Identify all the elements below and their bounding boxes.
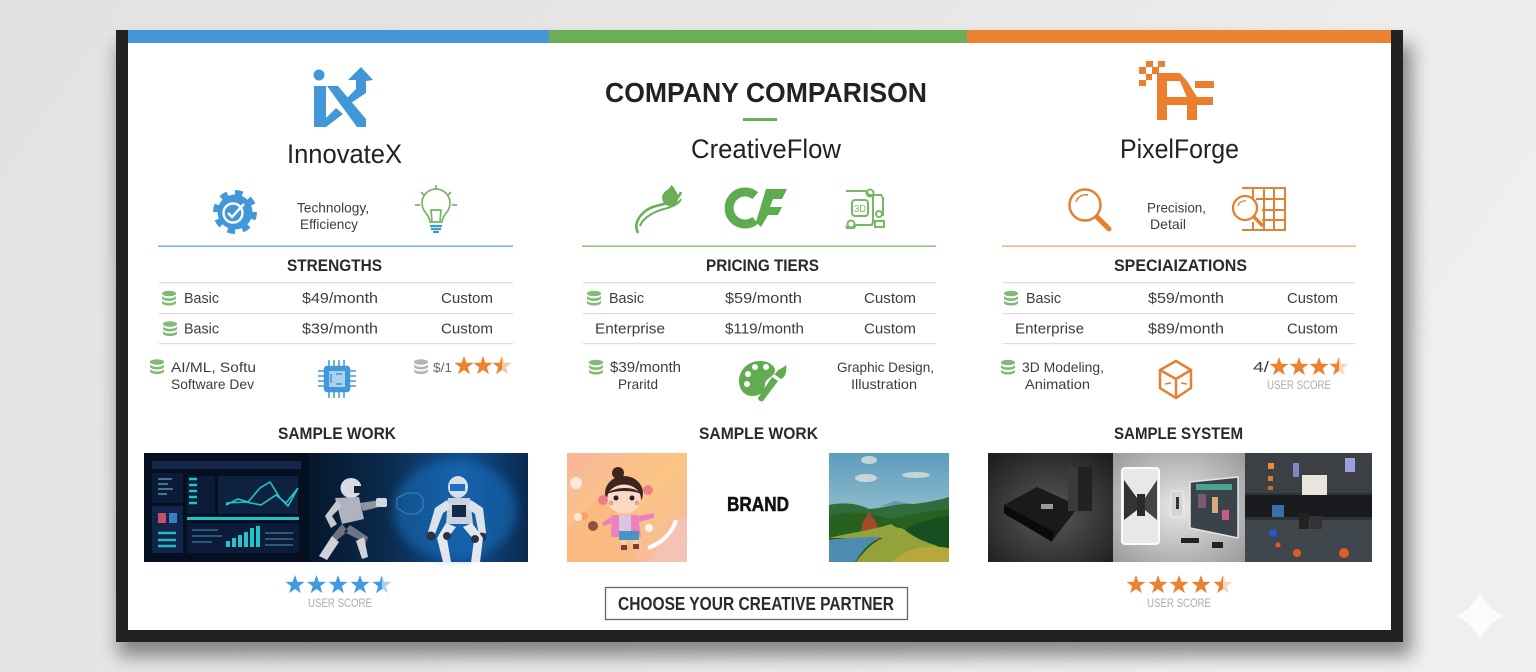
row: basic: Custom bbox=[864, 290, 916, 307]
entry price text bbox=[589, 359, 681, 392]
focus text: Efficiency bbox=[300, 216, 358, 232]
row: enterprise: $89/month bbox=[1148, 320, 1224, 338]
row: enterprise: Enterprise bbox=[1015, 320, 1084, 338]
row: basic: Custom bbox=[1287, 290, 1338, 307]
rating: blue stars bbox=[285, 575, 392, 593]
icon: 3D workflow bbox=[846, 190, 884, 228]
heading: pricing tiers: PRICING TIERS bbox=[706, 257, 819, 275]
white panel bbox=[128, 43, 1391, 630]
focus text: Detail bbox=[1150, 216, 1186, 232]
logo: PixelForge bbox=[1139, 61, 1214, 120]
row: basic 39 bbox=[163, 320, 493, 338]
icon: sparkle watermark bbox=[1456, 592, 1504, 640]
main title: COMPANY COMPARISON bbox=[605, 77, 927, 108]
logo: CF bbox=[729, 189, 787, 227]
row: basic: $59/month bbox=[725, 290, 802, 307]
icon: flame swoosh bbox=[636, 185, 681, 233]
heading: sample system: SAMPLE SYSTEM bbox=[1114, 425, 1243, 443]
rating: partial row bbox=[414, 356, 512, 375]
row: basic 49: Custom bbox=[441, 290, 493, 307]
specialty text: Illustration bbox=[851, 376, 917, 392]
user score label: USER SCORE bbox=[308, 598, 372, 610]
specialty text bbox=[150, 359, 256, 392]
robot right bbox=[426, 476, 486, 562]
specialty text: Graphic Design, bbox=[837, 359, 934, 375]
row: basic bbox=[587, 290, 916, 307]
logo: InnovateX bbox=[314, 67, 373, 127]
focus text: Technology, bbox=[297, 200, 369, 216]
sample image: character illustration bbox=[567, 453, 687, 562]
rating: partial score: USER SCORE bbox=[1267, 380, 1331, 392]
focus text bbox=[297, 200, 369, 232]
row: basic 39: Basic bbox=[184, 320, 219, 338]
title underline bbox=[743, 118, 777, 121]
row: basic 49: $49/month bbox=[302, 290, 378, 307]
specialty text: Software Dev bbox=[171, 376, 254, 392]
row: basic: $59/month bbox=[1148, 290, 1224, 307]
sample image: dashboard and robots bbox=[144, 453, 528, 562]
robot left bbox=[319, 478, 387, 560]
rating: partial row: $/1 bbox=[433, 360, 452, 375]
panel: InnovateX bbox=[144, 67, 528, 610]
heading: sample work: SAMPLE WORK bbox=[699, 425, 818, 443]
rating: partial score: 4/ bbox=[1253, 359, 1270, 376]
board frame bbox=[116, 30, 1403, 642]
specialty text: 3D Modeling, bbox=[1022, 359, 1104, 375]
row: basic bbox=[1004, 290, 1338, 307]
icon: chip bbox=[318, 360, 356, 398]
rating: partial score bbox=[1253, 357, 1349, 392]
panel: CreativeFlow: 3D bbox=[854, 204, 866, 215]
specialty text: AI/ML, Softu bbox=[171, 359, 256, 375]
sample image: landscape painting bbox=[829, 453, 949, 562]
sample image: product renders bbox=[988, 453, 1372, 562]
row: enterprise bbox=[1015, 320, 1338, 338]
entry price text: $39/month bbox=[610, 359, 681, 376]
row: basic 49 bbox=[162, 290, 493, 307]
row: basic: Basic bbox=[609, 290, 644, 307]
row: basic 49: Basic bbox=[184, 290, 219, 307]
row: enterprise: Enterprise bbox=[595, 320, 665, 338]
specialty text: Animation bbox=[1025, 376, 1090, 392]
panel: CreativeFlow bbox=[567, 134, 949, 620]
button: choose your creative partner: CHOOSE YOUR CREATIVE PARTNER bbox=[618, 594, 894, 614]
rating: orange stars bbox=[1126, 575, 1233, 593]
specialty text bbox=[1001, 359, 1104, 392]
user score label: USER SCORE bbox=[1147, 598, 1211, 610]
row: enterprise: $119/month bbox=[725, 320, 804, 338]
focus text bbox=[1147, 200, 1206, 232]
heading: sample work: SAMPLE WORK bbox=[278, 425, 396, 443]
company name: PixelForge bbox=[1120, 134, 1239, 164]
row: basic 39: $39/month bbox=[302, 320, 378, 338]
row: enterprise: Custom bbox=[864, 320, 916, 338]
row: basic 39: Custom bbox=[441, 320, 493, 338]
company name: InnovateX bbox=[287, 139, 402, 169]
icon: grid magnifier bbox=[1233, 188, 1285, 230]
heading: strengths: STRENGTHS bbox=[287, 257, 382, 275]
panel: PixelForge bbox=[988, 61, 1372, 610]
row: enterprise: Custom bbox=[1287, 320, 1338, 338]
icon: light bulb bbox=[415, 185, 457, 232]
company name: CreativeFlow bbox=[691, 134, 841, 164]
icon: palette and brush bbox=[739, 361, 786, 401]
specialty text bbox=[837, 359, 934, 392]
sample image: brand mark: BRAND bbox=[727, 494, 789, 516]
icon: magnifier bbox=[1070, 190, 1109, 229]
focus text: Precision, bbox=[1147, 200, 1206, 216]
icon: gear target bbox=[216, 192, 254, 232]
heading: specializations: SPECIAIZATIONS bbox=[1114, 257, 1247, 275]
icon: 3D cube bbox=[1160, 361, 1191, 398]
button: choose your creative partner bbox=[606, 588, 908, 620]
row: basic: Basic bbox=[1026, 290, 1061, 307]
top colour bar bbox=[128, 30, 1391, 43]
entry price text: Praritd bbox=[618, 376, 658, 392]
row: enterprise bbox=[595, 320, 916, 338]
